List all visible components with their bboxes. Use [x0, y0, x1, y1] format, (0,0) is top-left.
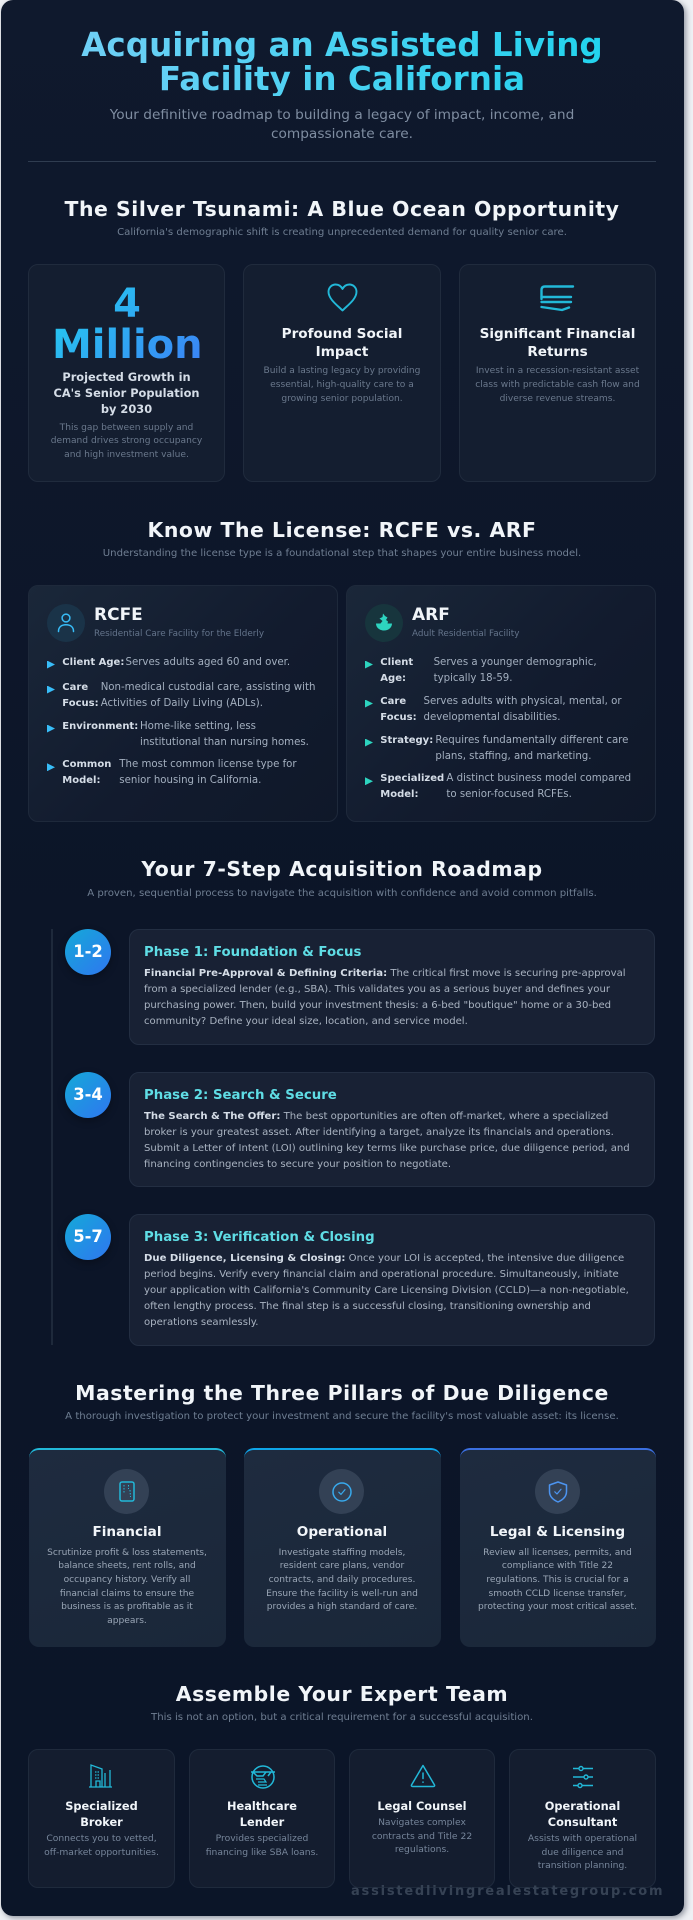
panel: consultant [509, 1749, 656, 1888]
pillar description [478, 1548, 637, 1612]
item: care focus: developmental disabilities. [424, 712, 560, 722]
pillar description: Review all licenses, permits, and [483, 1548, 632, 1558]
icon: check circle [319, 1469, 364, 1514]
stat label: by 2030 [101, 402, 152, 416]
pillar title: Legal & Licensing [490, 1524, 625, 1540]
member description [206, 1833, 318, 1858]
pillar title: Financial [92, 1524, 162, 1540]
member title: Operational [545, 1799, 620, 1813]
item: client age: Client [380, 656, 413, 668]
phase body: broker is your greatest asset. After identifying a target, analyze its financials and operations. [144, 1127, 614, 1138]
card description: growing senior population. [281, 394, 403, 404]
phase title: Phase 3: Verification & Closing [144, 1230, 375, 1245]
pillar description: balance sheets, rent rolls, and [58, 1561, 196, 1571]
panel: financial returns [459, 264, 656, 482]
member title: Lender [240, 1815, 284, 1829]
item: client age [365, 656, 597, 684]
item: environment: Home-like setting, less [140, 720, 256, 732]
panel: ARF [346, 585, 656, 822]
phase title: Phase 2: Search & Secure [144, 1088, 337, 1103]
phase body: Financial Pre-Approval & Defining Criteria: The critical first move is securing pre-approval [144, 968, 626, 979]
member title: Healthcare [227, 1799, 297, 1813]
item: specialized model: Specialized [380, 773, 444, 784]
member title: Specialized [65, 1799, 138, 1813]
watermark: assistedlivingrealestategroup.com [351, 1884, 664, 1899]
big number: Million [52, 322, 203, 368]
heading: due diligence: Mastering the Three Pillars of Due Diligence [75, 1381, 609, 1405]
item: care focus: Care [380, 696, 406, 706]
phase body: from a specialized lender (e.g., SBA). This validates you as a serious buyer and defines your [144, 984, 610, 995]
pillar description: smooth CCLD license transfer, [488, 1589, 627, 1599]
step badge 1-2 [65, 929, 111, 975]
item: care focus: Non-medical custodial care, assisting with [101, 682, 315, 692]
pillar description: compliance with Title 22 [502, 1561, 613, 1571]
item: specialized model: to senior-focused RCFEs. [446, 789, 572, 800]
title [81, 28, 603, 96]
item: specialized model: A distinct business model compared [446, 773, 631, 784]
item: common model: Model: [62, 775, 100, 786]
card title: Profound Social [282, 326, 402, 342]
subheading: team: This is not an option, but a critical requirement for a successful acquisition. [151, 1712, 533, 1723]
item: common model: Common [62, 759, 111, 770]
member description: due diligence and [542, 1847, 623, 1858]
phase body [144, 1253, 629, 1328]
panel: social impact [243, 264, 441, 482]
icon: lender globe [251, 1765, 275, 1789]
phase body: financing contingencies to secure your position to negotiate. [144, 1159, 451, 1170]
icon: sliders [573, 1766, 593, 1788]
icon: warning triangle [410, 1764, 436, 1788]
icon: heart [328, 284, 358, 312]
item: client age: Age: [380, 672, 406, 684]
item: common model: The most common license type for [119, 759, 297, 770]
phase body: Submit a Letter of Intent (LOI) outlining key terms like purchase price, due diligence period, and [144, 1143, 630, 1154]
phase body: period begins. Verify every financial claim and operational procedure. Simultaneously, initiate [144, 1269, 619, 1280]
member title [227, 1799, 297, 1829]
stat label: CA's Senior Population [53, 386, 200, 400]
heading: Silver Tsunami: The Silver Tsunami: A Blue Ocean Opportunity [64, 197, 620, 221]
icon: building [89, 1764, 112, 1788]
item: care focus: Care [62, 682, 88, 692]
icon: person [47, 604, 85, 642]
panel: RCFE [28, 585, 338, 822]
card description: class with predictable cash flow and [475, 380, 640, 390]
big number [52, 284, 202, 366]
item: care focus: Focus: [62, 698, 99, 708]
ARF title: ARF [412, 605, 450, 625]
item: common model: senior housing in California. [119, 775, 261, 786]
big number: 4 [113, 281, 141, 327]
icon: ARF globe [365, 604, 403, 642]
title: Facility in California [159, 60, 525, 98]
member description: Connects you to vetted, [46, 1833, 157, 1844]
phase body [144, 968, 626, 1027]
icon: financial document [104, 1469, 149, 1514]
card title: Impact [316, 344, 368, 360]
item: client age: Client Age: [62, 656, 124, 668]
step badge 3-4 [65, 1072, 111, 1118]
pillar description: Ensure the facility is well-run and [266, 1589, 418, 1599]
panel: financial pillar [28, 1448, 226, 1647]
step badge 1-2: 1-2 [73, 942, 103, 961]
card description [264, 366, 420, 404]
card title: Returns [527, 344, 588, 360]
phase body: often lengthy process. The final step is a successful closing, transitioning ownership and [144, 1301, 591, 1312]
item: client age [47, 656, 290, 668]
item: care focus: Focus: [380, 712, 417, 722]
pillar description: business is as profitable as it [61, 1602, 193, 1612]
item: strategy [365, 734, 628, 762]
member description: contracts and Title 22 [372, 1831, 472, 1842]
member description [372, 1817, 472, 1855]
member description: regulations. [395, 1844, 449, 1855]
member description: Assists with operational [528, 1833, 637, 1844]
pillar description: Scrutinize profit & loss statements, [47, 1548, 207, 1558]
member title [65, 1799, 138, 1829]
icon: shield check [535, 1469, 580, 1514]
member description: Provides specialized [216, 1833, 308, 1844]
panel: legal pillar [460, 1448, 656, 1647]
member description: Navigates complex [378, 1817, 466, 1828]
card description: diverse revenue streams. [500, 394, 615, 404]
member title: Legal Counsel [377, 1799, 467, 1813]
phase body: community? Define your ideal size, location, and service model. [144, 1016, 468, 1027]
subheading: due diligence: A thorough investigation to protect your investment and secure the facility's most valuable asset: its license. [65, 1411, 619, 1422]
phase body: purchasing power. Then, build your investment thesis: a 6-bed "boutique" home or a 30-bed [144, 1000, 611, 1011]
subtitle [110, 107, 574, 142]
phase body: Due Diligence, Licensing & Closing: Once your LOI is accepted, the intensive due diligence [144, 1253, 624, 1264]
phase body: your application with California's Community Care Licensing Division (CCLD)—a non-negotiable, [144, 1285, 629, 1296]
item: care focus [47, 682, 315, 708]
item: specialized model [365, 773, 631, 800]
panel: broker [28, 1749, 175, 1888]
card description: Invest in a recession-resistant asset [476, 366, 639, 376]
pillar description [266, 1548, 418, 1612]
item: care focus [365, 696, 622, 722]
member title: Broker [80, 1815, 123, 1829]
step badge 5-7 [65, 1214, 111, 1260]
panel: operational pillar [244, 1448, 440, 1647]
pillar description: contracts, and daily procedures. [269, 1575, 415, 1585]
card description: Build a lasting legacy by providing [264, 366, 420, 376]
icon: finance lines [540, 285, 574, 312]
stat description: demand drives strong occupancy [51, 436, 202, 446]
phase body: The Search & The Offer: The best opportunities are often off-market, where a specialized [144, 1111, 608, 1122]
panel: phase 2 [129, 1072, 655, 1187]
phase title: Phase 1: Foundation & Focus [144, 945, 361, 960]
item: environment: institutional than nursing homes. [140, 736, 309, 748]
stat label: Projected Growth in [62, 370, 191, 384]
subtitle: compassionate care. [271, 126, 413, 142]
pillar description: resident care plans, vendor [280, 1561, 404, 1571]
pillar description [47, 1548, 207, 1626]
pillar description: Investigate staffing models, [279, 1548, 405, 1558]
pillar description: protecting your most critical asset. [478, 1602, 637, 1612]
stat description: and high investment value. [64, 450, 189, 460]
member description [528, 1833, 637, 1871]
card title [480, 326, 635, 360]
item: specialized model: Model: [380, 789, 418, 800]
stat label [53, 370, 200, 416]
member title: Consultant [548, 1815, 617, 1829]
heading: team: Assemble Your Expert Team [176, 1682, 508, 1706]
card description [475, 366, 640, 404]
subheading: Silver Tsunami: California's demographic shift is creating unprecedented demand for quality senior care. [117, 227, 567, 238]
member description: transition planning. [538, 1860, 627, 1871]
member description: off-market opportunities. [44, 1847, 159, 1858]
card title: Significant Financial [480, 326, 635, 342]
panel: phase 1 [129, 929, 655, 1045]
title: Acquiring an Assisted Living [81, 26, 603, 64]
panel: phase 3 [129, 1214, 655, 1346]
pillar description: provides a high standard of care. [267, 1602, 417, 1612]
panel: counsel [349, 1749, 495, 1888]
item: client age: Serves adults aged 60 and over. [126, 656, 290, 668]
phase body [144, 1111, 630, 1170]
item: strategy: Requires fundamentally different care [435, 734, 628, 746]
step badge 5-7: 5-7 [73, 1227, 103, 1246]
item: strategy: Strategy: [380, 734, 433, 746]
ARF subtitle: Adult Residential Facility [412, 628, 519, 638]
heading: roadmap: Your 7-Step Acquisition Roadmap [141, 857, 543, 881]
item: environment: Environment: [62, 720, 138, 732]
pillar title: Operational [297, 1524, 387, 1540]
pillar description: appears. [107, 1616, 147, 1626]
pillar description: financial claims to ensure the [60, 1589, 194, 1599]
stat description: This gap between supply and [60, 423, 193, 433]
pillar description: occupancy history. Verify all [64, 1575, 190, 1585]
item: care focus: Serves adults with physical, mental, or [424, 696, 622, 706]
item: client age: typically 18-59. [434, 672, 513, 684]
subheading: license: Understanding the license type is a foundational step that shapes your entire business model. [103, 548, 581, 558]
card title [282, 326, 402, 360]
item: environment [47, 720, 309, 748]
card description: essential, high-quality care to a [270, 380, 414, 390]
member description [44, 1833, 159, 1858]
member title [545, 1799, 620, 1829]
heading: license: Know The License: RCFE vs. ARF [147, 518, 537, 542]
member description: financing like SBA loans. [206, 1847, 318, 1858]
phase body: operations seamlessly. [144, 1317, 258, 1328]
RCFE subtitle: Residential Care Facility for the Elderly [94, 628, 264, 638]
item: common model [47, 759, 297, 786]
item: strategy: plans, staffing, and marketing. [435, 750, 592, 762]
panel: 4 million stat [28, 264, 225, 482]
subheading: roadmap: A proven, sequential process to navigate the acquisition with confidence and avoid common pitfalls. [87, 888, 597, 898]
step badge 3-4: 3-4 [73, 1085, 103, 1104]
item: client age: Serves a younger demographic, [434, 656, 597, 668]
pillar description: regulations. This is crucial for a [486, 1575, 629, 1585]
stat description [51, 423, 202, 460]
subtitle: Your definitive roadmap to building a legacy of impact, income, and [110, 107, 574, 123]
panel: lender [189, 1749, 335, 1888]
RCFE title: RCFE [94, 605, 143, 625]
item: care focus: Activities of Daily Living (ADLs). [101, 698, 263, 708]
